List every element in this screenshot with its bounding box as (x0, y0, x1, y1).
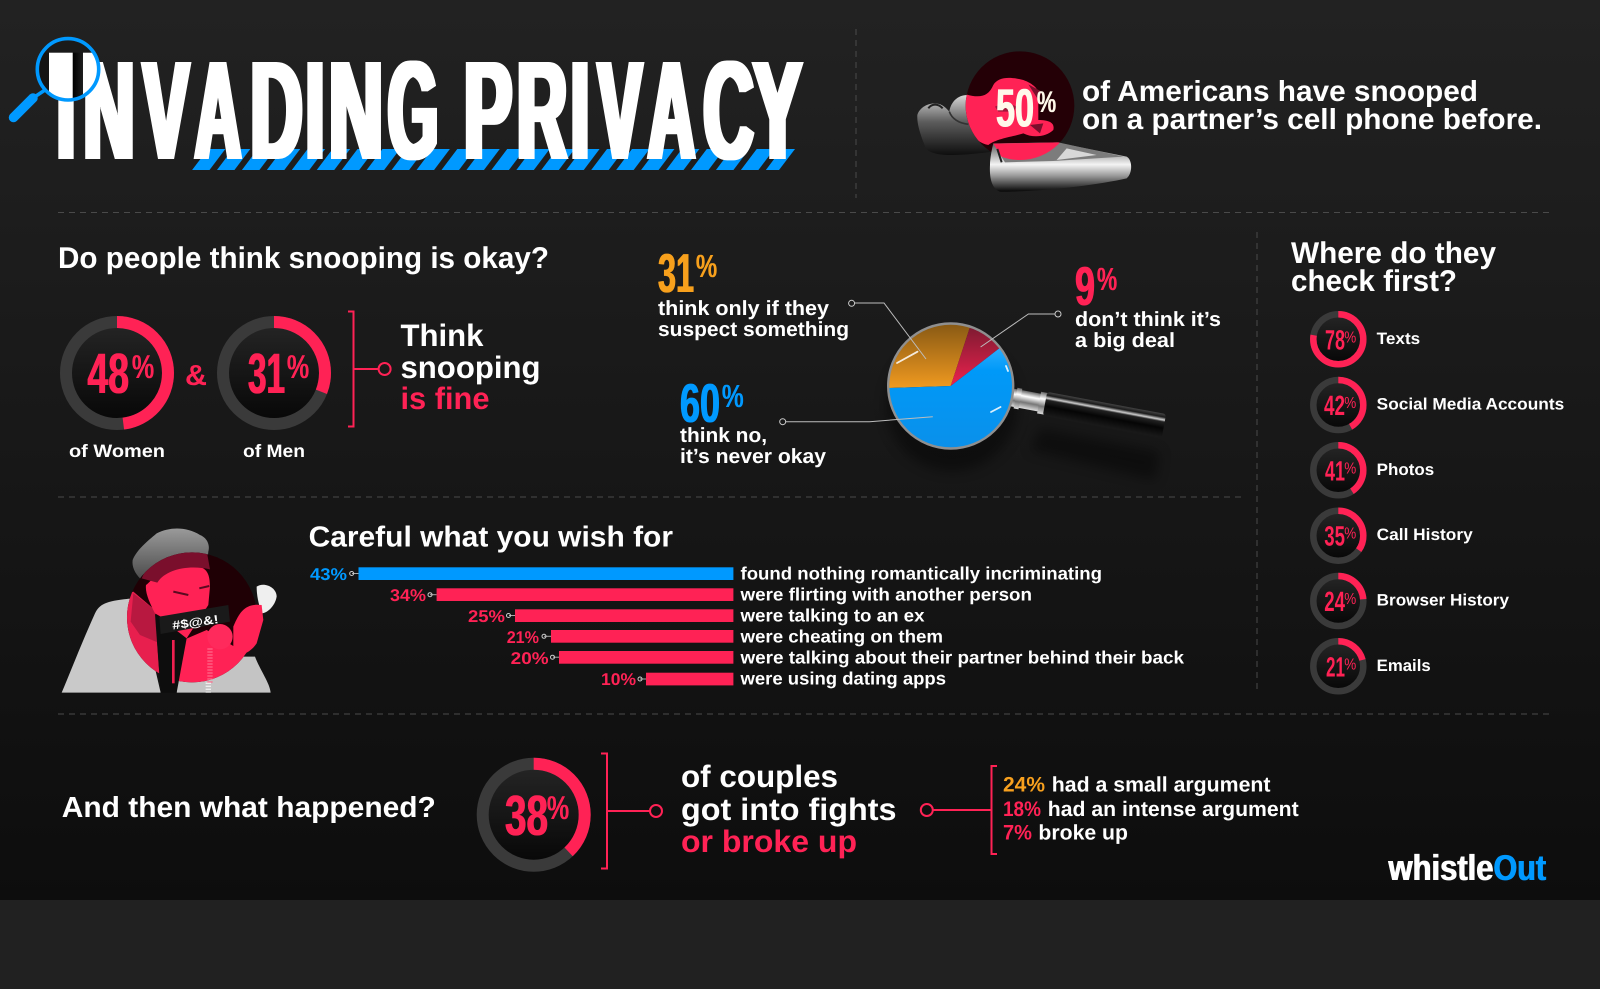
logo: whistleOut: whistle (1388, 847, 1494, 888)
donut: 35% call history: % (1344, 526, 1356, 543)
icon: blue magnifying glass on title (14, 38, 100, 118)
text: 50% of Americans: on a partner’s cell phone before. (1082, 104, 1542, 136)
illustration: man shouting into phone (62, 529, 277, 693)
illustration: hand on cell phone with 50%: % (1037, 86, 1056, 119)
title: Invading Privacy: R (517, 31, 567, 189)
donut: 42% social media: % (1344, 395, 1356, 412)
text: of couples got into fights or broke up: or broke up (681, 824, 857, 859)
donut: 31% of men: 31 (248, 342, 285, 406)
donut: 78% texts (1313, 314, 1420, 364)
donut: 41% photos (1313, 445, 1434, 495)
callout: 31% think only if they suspect something (658, 242, 926, 359)
donut: 38% of couples: % (547, 789, 569, 826)
text: 50% of Americans (1082, 76, 1542, 136)
pie chart magnifying glass (886, 324, 1166, 480)
bar: 20% talking behind back: were talking about their partner behind their back (739, 648, 1185, 668)
logo: whistleOut: Out (1494, 847, 1546, 888)
text: think snooping is fine (400, 318, 540, 416)
donut: 35% call history (1313, 511, 1474, 561)
bar: 21% cheating (507, 626, 943, 647)
title: Invading Privacy: V (143, 31, 189, 189)
text: of couples got into fights or broke up: of couples (681, 759, 838, 794)
donut: 31% of men: % (287, 348, 309, 385)
title: Invading Privacy: Y (753, 31, 802, 189)
donut: 42% social media: Social Media Accounts (1377, 396, 1564, 414)
callout: 9% don't think it's a big deal (981, 255, 1221, 352)
title: Invading Privacy: D (250, 31, 302, 189)
callout: 9% don't think it's a big deal: % (1097, 261, 1117, 297)
callout: 31% think only if they suspect something: % (696, 248, 717, 284)
list: where they check first (1313, 314, 1564, 691)
donut: 41% photos: Photos (1377, 461, 1434, 479)
donut: 41% photos: % (1344, 460, 1356, 477)
donut: 35% call history: Call History (1377, 526, 1474, 544)
donut: 38% of couples (483, 764, 585, 866)
donut: 78% texts: Texts (1377, 330, 1420, 348)
title: Invading Privacy: I (306, 31, 324, 189)
heading: where do they check first: check first? (1291, 265, 1457, 298)
title: Invading Privacy: A (648, 31, 695, 189)
donut: 48% of women (66, 322, 168, 461)
text: argument breakdown (1003, 774, 1299, 844)
donut: 48% of women: of Women (69, 441, 165, 461)
illustration: man shouting into phone: #$@&! (171, 612, 219, 632)
donut: 31% of men: of Men (243, 441, 305, 461)
callout: 9% don't think it's a big deal: 9 (1075, 255, 1095, 317)
bar: 43% found nothing: 43% (310, 565, 347, 584)
donut: 35% call history: 35 (1324, 521, 1345, 552)
text: of couples got into fights or broke up: got into fights (681, 792, 896, 827)
bar: 10% dating apps: were using dating apps (739, 668, 946, 688)
bar: 10% dating apps: 10% (601, 670, 636, 689)
heading: careful what you wish for: Careful what you wish for (309, 522, 673, 554)
heading: where do they check first (1291, 237, 1496, 298)
donut: 21% emails: % (1344, 656, 1356, 673)
bar: 25% talking to an ex (468, 606, 924, 626)
bar: 34% flirting (390, 584, 1032, 605)
title: Invading Privacy: N (329, 31, 383, 189)
text: argument breakdown: 18% (1003, 798, 1041, 821)
callout: 60% think no, it's never okay: think no, (680, 424, 767, 447)
title: Invading Privacy: I (57, 31, 75, 189)
illustration: hand on cell phone with 50% (917, 51, 1131, 192)
bar: 21% cheating: 21% (507, 628, 539, 647)
bar: 10% dating apps (601, 668, 946, 689)
donut: 24% browser history: % (1344, 591, 1356, 608)
title: Invading Privacy: I (571, 31, 589, 189)
bar: 25% talking to an ex: were talking to an ex (739, 606, 924, 626)
text: argument breakdown: broke up (1038, 821, 1128, 844)
donut: 42% social media: 42 (1324, 390, 1345, 421)
illustration: hand on cell phone with 50%: 50 (996, 78, 1034, 138)
text: think snooping is fine: Think (400, 318, 484, 353)
heading: and then what happened: And then what happened? (62, 792, 436, 824)
text: argument breakdown: had a small argument (1052, 774, 1270, 797)
title: Invading Privacy: N (84, 31, 134, 189)
donut: 24% browser history: 24 (1324, 586, 1345, 617)
title: Invading Privacy: P (464, 31, 512, 189)
bar: 20% talking behind back (511, 648, 1185, 668)
text: think snooping is fine: is fine (400, 381, 490, 416)
donut: 41% photos: 41 (1325, 455, 1345, 486)
donut: 21% emails: 21 (1326, 651, 1345, 682)
callout: 31% think only if they suspect something: think only if they (658, 297, 830, 320)
title: Invading Privacy: A (195, 31, 241, 189)
title: Invading Privacy: G (388, 31, 438, 189)
donut: 31% of men (223, 322, 325, 461)
callout: 9% don't think it's a big deal: a big deal (1075, 329, 1175, 352)
text: argument breakdown: 7% (1003, 821, 1032, 844)
text: think snooping is fine: snooping (400, 350, 540, 385)
title: Invading Privacy: V (598, 31, 642, 189)
bar: 43% found nothing (310, 564, 1102, 584)
bar: 43% found nothing: found nothing romantically incriminating (740, 564, 1102, 584)
donut: 38% of couples: 38 (505, 784, 548, 848)
text: 50% of Americans: of Americans have snooped (1082, 76, 1478, 108)
donut: 21% emails (1313, 641, 1431, 691)
heading: where do they check first: Where do they (1291, 237, 1496, 270)
bracket connector: think snooping is fine (348, 312, 391, 426)
donut: 42% social media (1313, 380, 1564, 430)
bar: 25% talking to an ex: 25% (468, 607, 505, 626)
bar: 34% flirting: 34% (390, 586, 426, 605)
bracket connector: argument breakdown (921, 766, 997, 854)
donut: 24% browser history: Browser History (1377, 592, 1510, 610)
bar: 21% cheating: were cheating on them (739, 626, 943, 646)
callout: 9% don't think it's a big deal: don’t think it’s (1075, 308, 1221, 331)
donut: 24% browser history (1313, 576, 1510, 626)
donut: 78% texts: 78 (1325, 324, 1345, 356)
donut: 48% of women: 48 (88, 342, 129, 406)
callout: 60% think no, it's never okay: 60 (680, 372, 720, 434)
bar: 34% flirting: were flirting with another person (739, 584, 1032, 604)
callout: 31% think only if they suspect something: 31 (658, 242, 694, 304)
title: Invading Privacy: C (704, 31, 754, 189)
text: argument breakdown: 24% (1003, 774, 1045, 797)
callout: 60% think no, it's never okay (680, 372, 933, 468)
ampersand: & (185, 360, 207, 392)
bar: 20% talking behind back: 20% (511, 649, 549, 668)
callout: 60% think no, it's never okay: it’s never okay (680, 445, 827, 468)
text: of couples got into fights or broke up (681, 759, 896, 859)
heading: do people think snooping is okay: Do people think snooping is okay? (58, 242, 549, 275)
callout: 31% think only if they suspect something: suspect something (658, 318, 849, 341)
donut: 21% emails: Emails (1377, 657, 1431, 675)
title: Invading Privacy (57, 31, 802, 189)
bracket connector: of couples (601, 754, 662, 868)
callout: 60% think no, it's never okay: % (722, 378, 744, 414)
donut: 78% texts: % (1344, 330, 1356, 346)
bar chart: careful what you wish for (310, 564, 1185, 689)
donut: 48% of women: % (132, 348, 154, 385)
text: argument breakdown: had an intense argument (1048, 798, 1299, 821)
